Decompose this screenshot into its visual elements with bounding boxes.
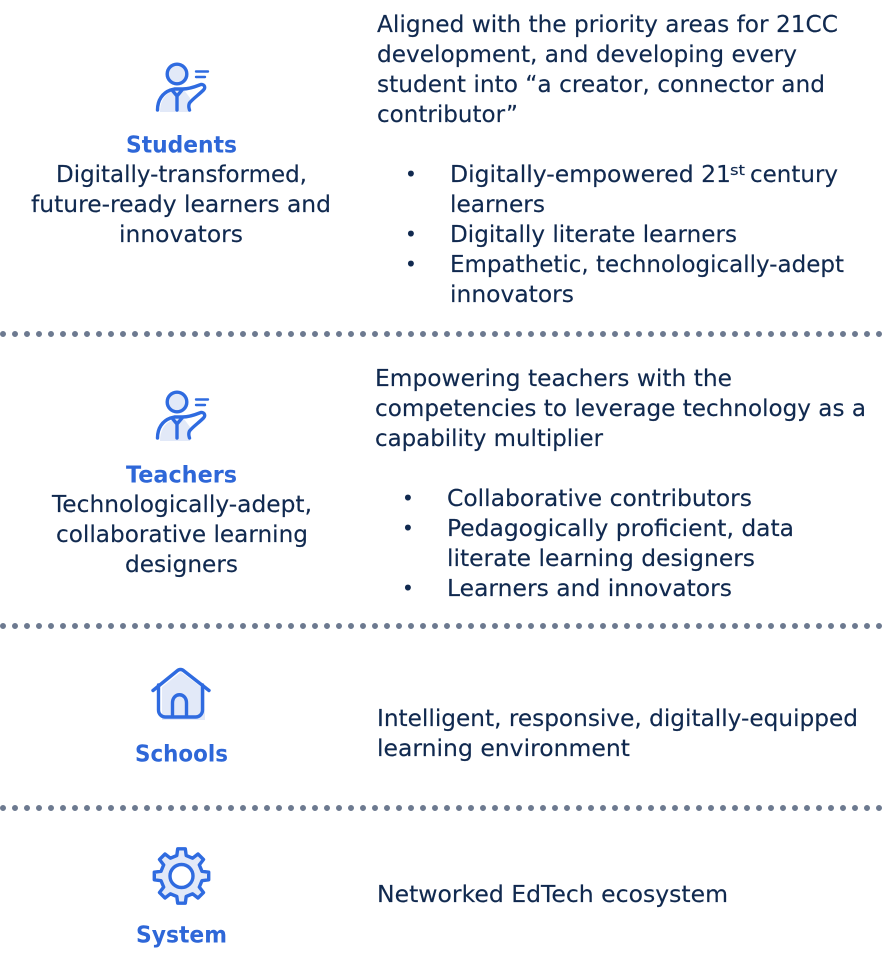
list: teachers outcomes: Collaborative contributors <box>447 484 752 512</box>
text: students description: Digitally-transformed, <box>56 160 307 188</box>
text: schools description <box>377 704 858 762</box>
text: teachers intro: capability multiplier <box>375 424 603 452</box>
heading: teachers: Teachers <box>126 462 237 488</box>
text: teachers description <box>51 490 312 578</box>
list: students outcomes: century <box>750 160 838 188</box>
icon: teacher figure <box>158 392 208 441</box>
text: teachers description: designers <box>125 550 238 578</box>
heading: schools: Schools <box>135 742 228 768</box>
text: students description <box>31 160 331 248</box>
list: students outcomes: • <box>405 222 417 246</box>
icon: gear <box>154 849 209 903</box>
text: schools description: Intelligent, responsive, digitally-equipped <box>377 704 858 732</box>
text: students intro: Aligned with the priority areas for 21CC <box>377 10 838 38</box>
text: students intro: student into “a creator, connector and <box>377 70 825 98</box>
list: teachers outcomes: Pedagogically proficient, data <box>447 514 794 542</box>
list: teachers outcomes: Learners and innovators <box>447 574 732 602</box>
list: teachers outcomes: literate learning designers <box>447 544 755 572</box>
panel: students <box>31 10 844 308</box>
list: students outcomes: Digitally-empowered 21 <box>450 160 731 188</box>
list: students outcomes: Digitally literate learners <box>450 220 737 248</box>
text: teachers intro: competencies to leverage technology as a <box>375 394 866 422</box>
list: teachers outcomes: • <box>402 516 414 540</box>
icon: house <box>153 670 209 720</box>
list: teachers outcomes <box>402 484 794 602</box>
list: students outcomes: Empathetic, technologically-adept <box>450 250 844 278</box>
heading: students: Students <box>126 132 237 158</box>
icon: student figure <box>158 64 208 112</box>
text: schools description: learning environment <box>377 734 630 762</box>
text: teachers description: collaborative learning <box>56 520 308 548</box>
text: teachers description: Technologically-adept, <box>51 490 312 518</box>
list: students outcomes <box>405 160 844 308</box>
panel: schools <box>135 670 858 768</box>
text: system description: Networked EdTech ecosystem <box>377 880 728 908</box>
text: students description: future-ready learners and <box>31 190 331 218</box>
panel: teachers <box>51 364 866 602</box>
text: teachers intro <box>375 364 866 452</box>
list: students outcomes: • <box>405 162 417 186</box>
text: students intro: development, and developing every <box>377 40 797 68</box>
text: students intro <box>377 10 838 128</box>
text: students description: innovators <box>119 220 243 248</box>
list: teachers outcomes: • <box>402 486 414 510</box>
text: students intro: contributor” <box>377 100 518 128</box>
text: teachers intro: Empowering teachers with the <box>375 364 732 392</box>
list: teachers outcomes: • <box>402 576 414 600</box>
list: students outcomes: learners <box>450 190 545 218</box>
heading: system: System <box>136 922 227 948</box>
panel: system <box>136 849 728 948</box>
list: students outcomes: • <box>405 252 417 276</box>
list: students outcomes: innovators <box>450 280 574 308</box>
list: students outcomes: st <box>730 163 746 179</box>
